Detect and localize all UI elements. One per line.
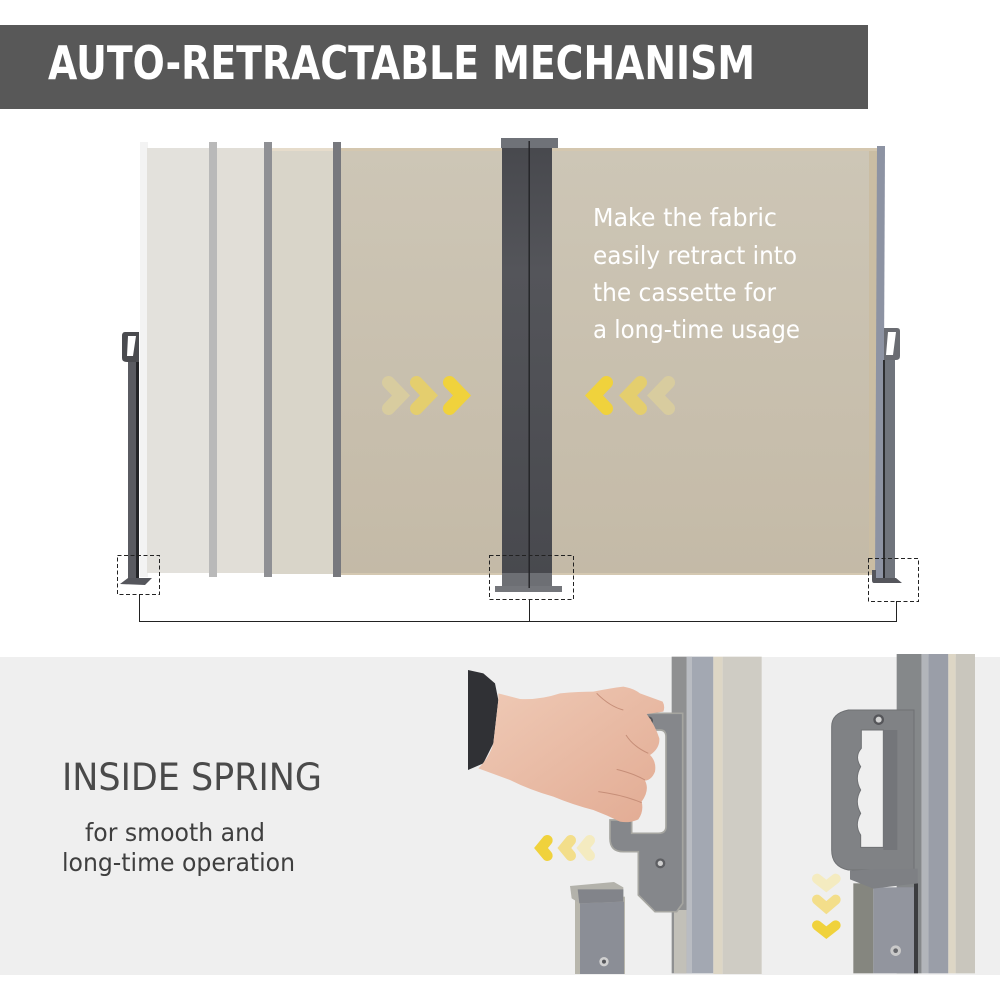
photo: handle closeup bbox=[817, 654, 975, 973]
ergonomic grip handle bbox=[832, 710, 914, 870]
title text: AUTO-RETRACTABLE MECHANISM bbox=[48, 36, 755, 90]
lower post bbox=[850, 869, 918, 973]
bottom panel: inside spring bbox=[0, 654, 1000, 975]
sleeve bbox=[468, 670, 498, 770]
fabric caption: a long-time usage bbox=[593, 315, 800, 344]
retractable screen illustration bbox=[118, 138, 918, 622]
fabric caption: easily retract into bbox=[593, 241, 797, 270]
description: long-time operation bbox=[62, 848, 295, 877]
description bbox=[62, 818, 295, 877]
finger creases bbox=[597, 693, 648, 803]
fabric caption: Make the fabric bbox=[593, 203, 777, 232]
arrows: chevrons pointing right bbox=[388, 382, 462, 408]
fabric caption bbox=[593, 203, 800, 344]
handle bolts bbox=[644, 716, 665, 868]
central cassette bbox=[495, 138, 562, 592]
handle bbox=[610, 713, 683, 912]
arrows: chevrons pointing left bbox=[541, 840, 590, 856]
arrows: chevrons pointing down bbox=[817, 879, 836, 933]
frame rail and fabric edge bbox=[672, 657, 762, 974]
description: for smooth and bbox=[85, 818, 265, 847]
title banner bbox=[0, 25, 868, 109]
handle bolt bbox=[873, 714, 884, 725]
hand bbox=[478, 687, 664, 822]
frame rail and fabric edge bbox=[897, 654, 975, 973]
dashed callout boxes and bracket bbox=[118, 556, 918, 622]
photo: hand pulling the handle bbox=[468, 657, 762, 974]
heading: INSIDE SPRING bbox=[62, 756, 322, 799]
left post and handle bbox=[120, 332, 152, 585]
arrows: chevrons pointing left bbox=[594, 382, 668, 408]
right post and handle bbox=[872, 146, 902, 583]
ghost fabric positions bbox=[140, 142, 341, 577]
main fabric bbox=[341, 148, 880, 575]
lower post bbox=[570, 882, 625, 974]
fabric caption: the cassette for bbox=[593, 278, 777, 307]
